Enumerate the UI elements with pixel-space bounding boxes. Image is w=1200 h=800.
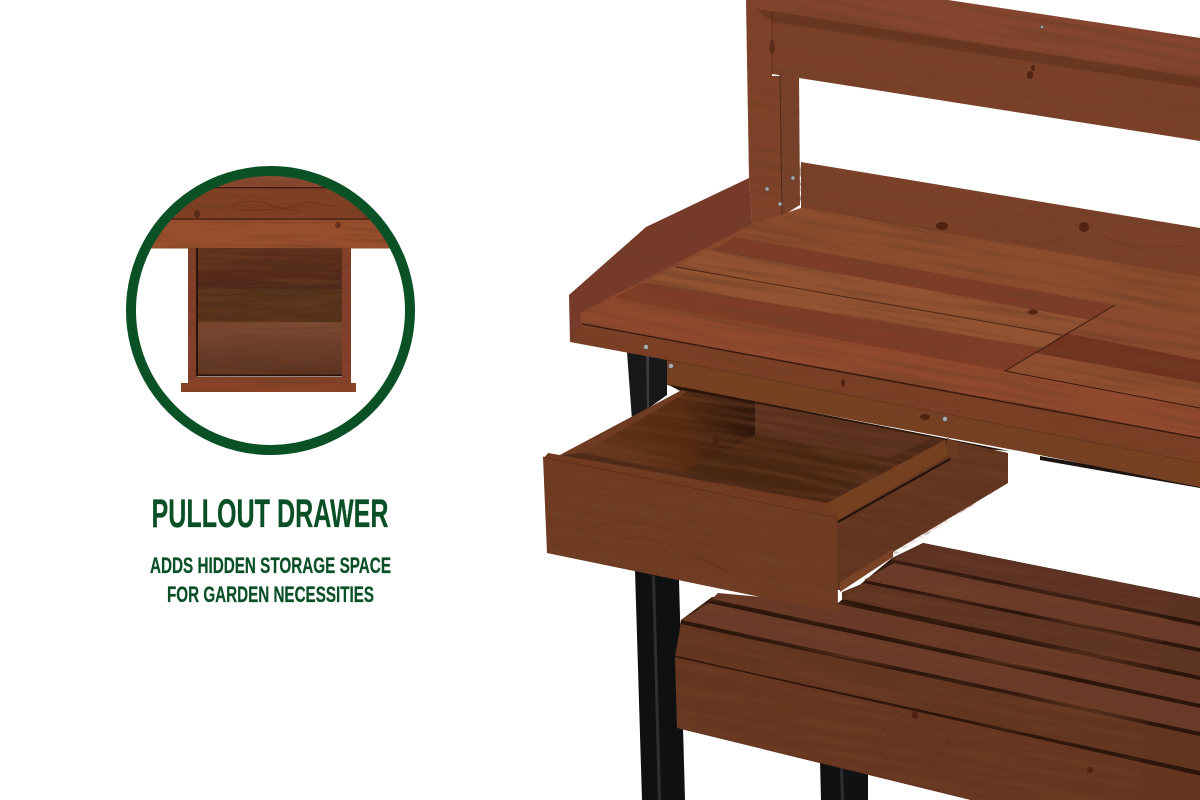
drawer left rail xyxy=(560,390,687,455)
lower splash board xyxy=(801,162,1200,278)
drawer front panel xyxy=(543,453,838,613)
tabletop planks xyxy=(580,208,1200,437)
side rail of the tabletop xyxy=(569,178,760,342)
inset: circular drawer close-up xyxy=(130,170,410,450)
plank seams and shadow lines xyxy=(543,11,1200,775)
black metal legs xyxy=(627,352,1200,800)
top shelf and upper back board xyxy=(750,0,1200,141)
inset wood: tabletop and closed drawer xyxy=(151,176,390,392)
screws xyxy=(644,26,1044,422)
wood grain overlay xyxy=(544,0,1200,761)
lower shelf slats xyxy=(675,543,1200,800)
text block: description xyxy=(150,553,391,607)
text block: description: ADDS HIDDEN STORAGE SPACE xyxy=(150,553,391,578)
backboard post xyxy=(746,0,800,227)
text block: description: FOR GARDEN NECESSITIES xyxy=(167,582,374,607)
apron under tabletop xyxy=(570,325,1200,487)
heading: pullout drawer: PULLOUT DRAWER xyxy=(152,492,389,536)
inset: green ring xyxy=(131,171,410,450)
bench wood xyxy=(543,0,1200,800)
drawer right side xyxy=(827,438,1008,592)
knots and grain swirls in the wood xyxy=(600,40,1190,773)
drawer interior xyxy=(560,390,958,520)
